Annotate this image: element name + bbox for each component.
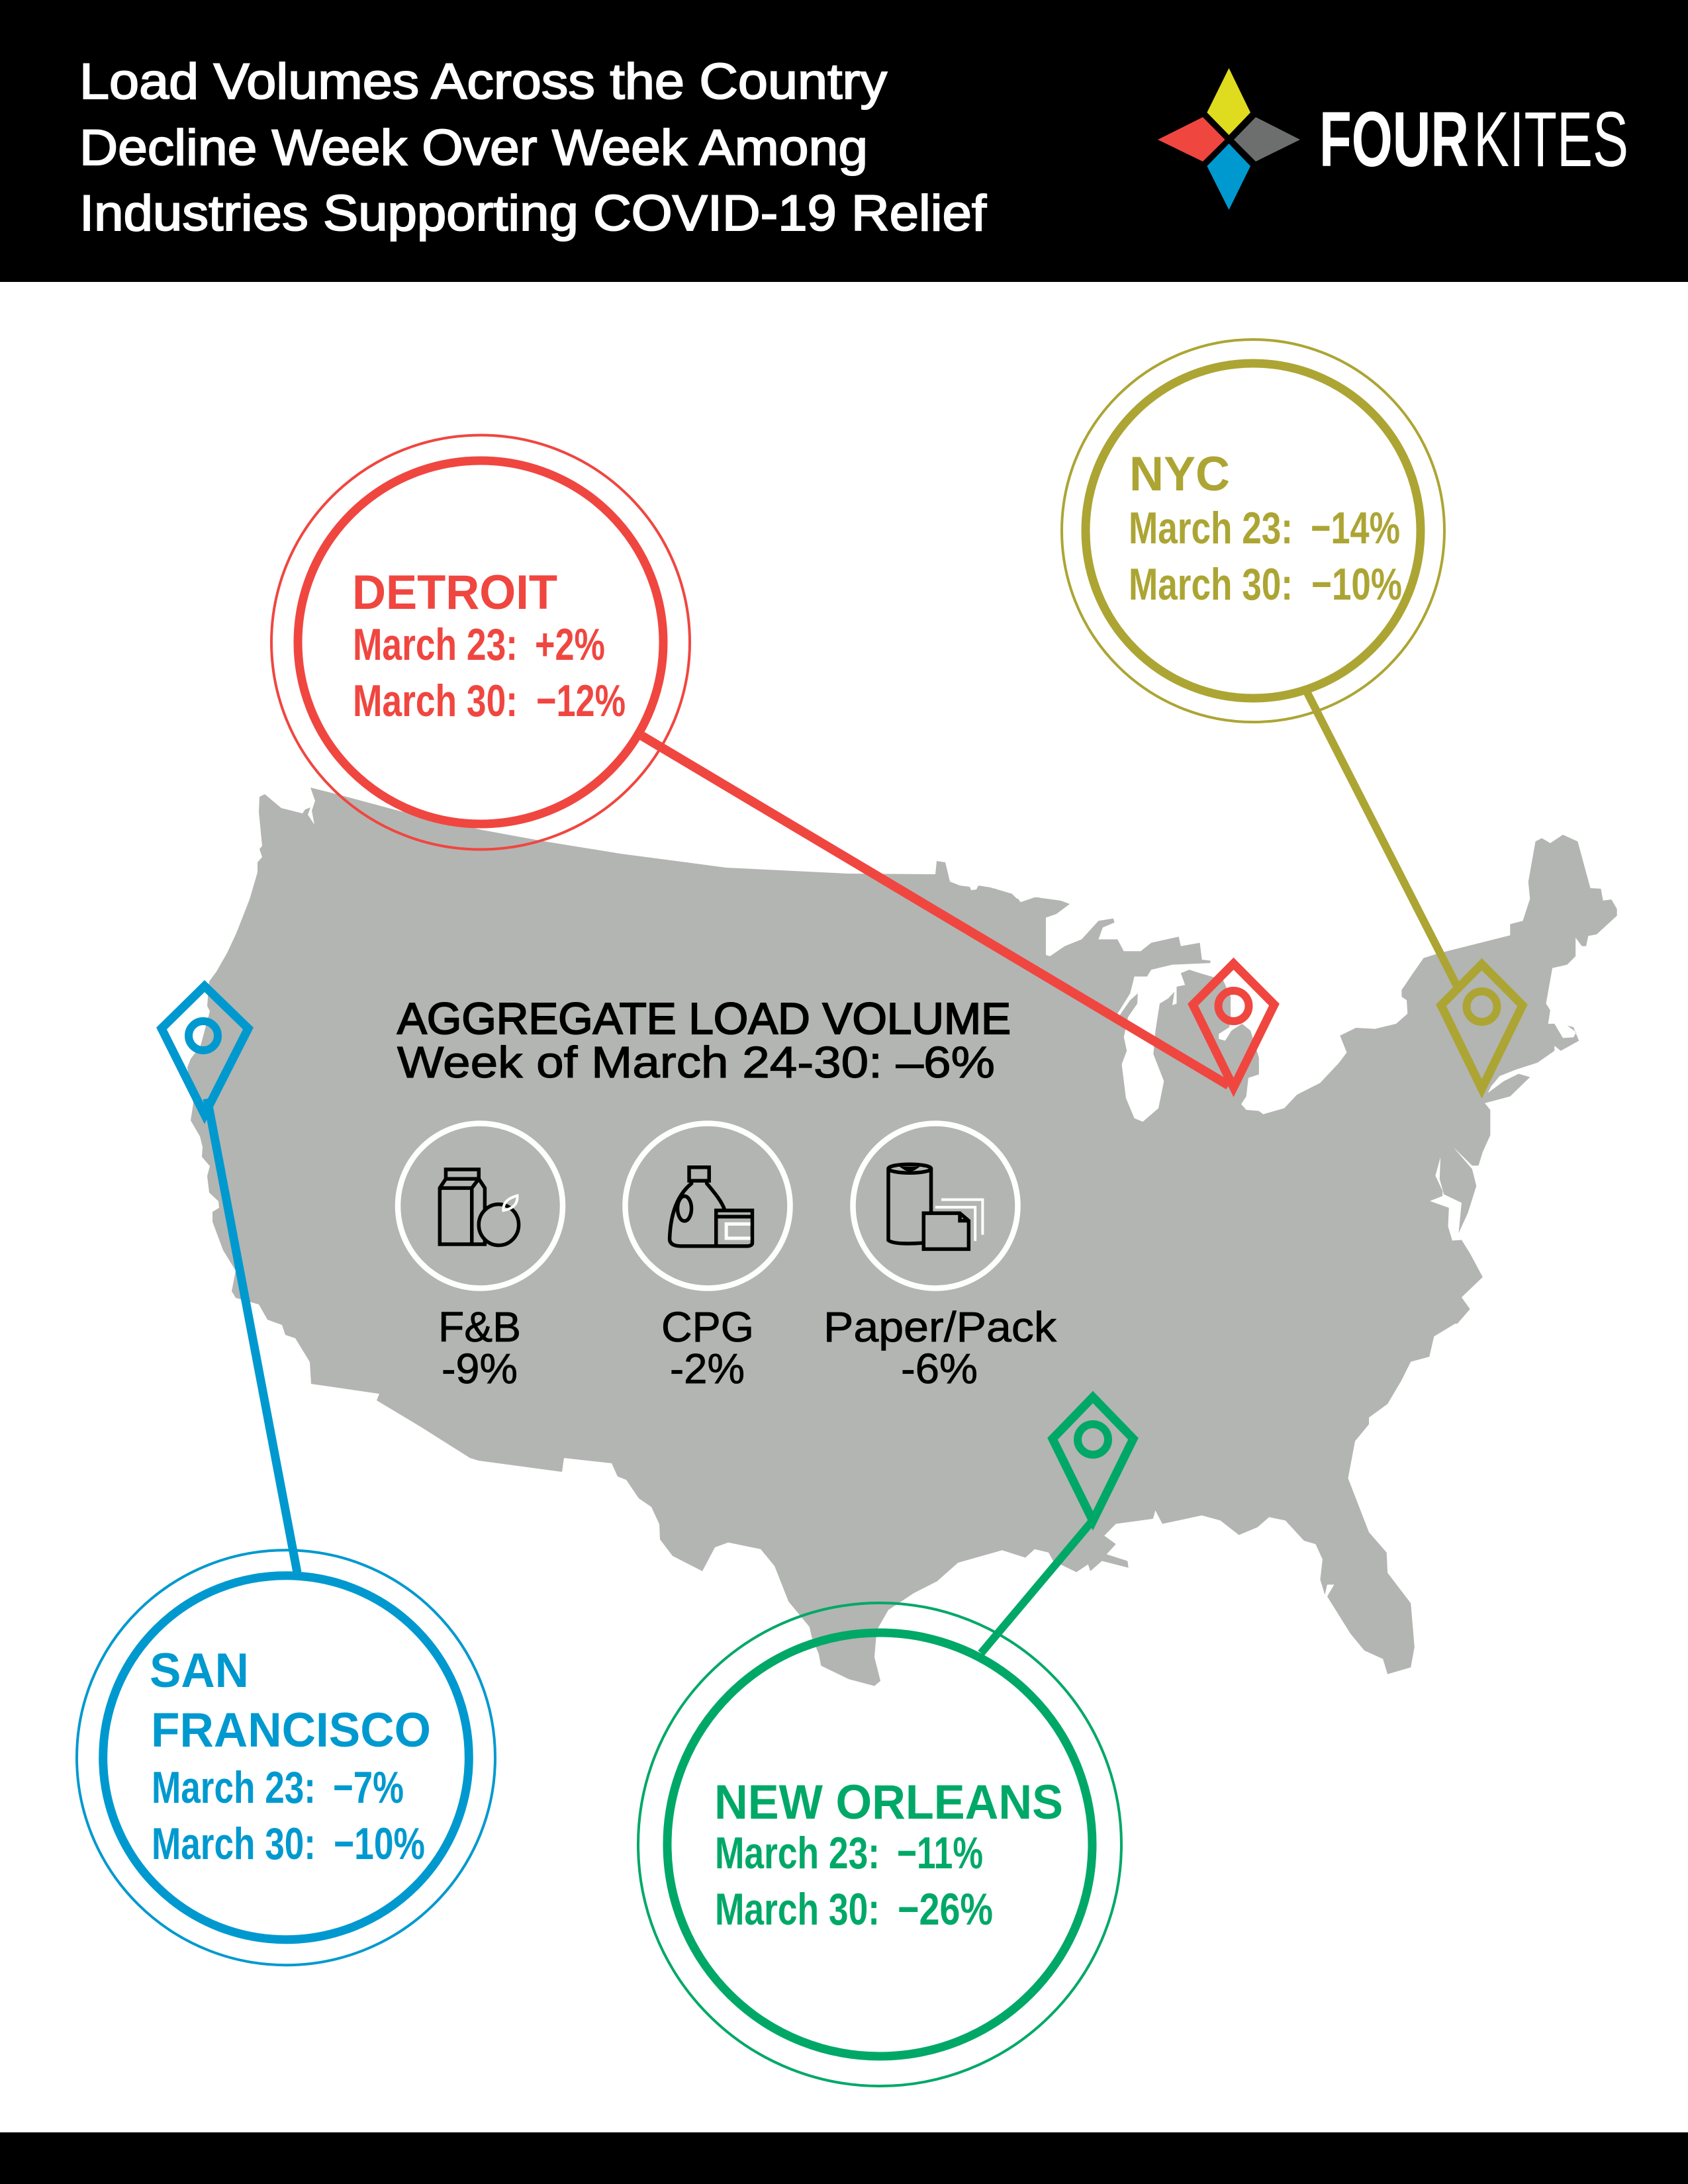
March 30 figure: −10% — [334, 1819, 425, 1869]
heading: aggregate load volume — [397, 994, 1011, 1087]
label: Paper/Pack: Paper/Pack — [823, 1303, 1057, 1351]
panel: CPG — [625, 1124, 790, 1392]
March 23 figure: −11% — [897, 1828, 983, 1878]
map: contiguous United States — [187, 788, 1617, 1686]
March 23 figure: March 23: — [152, 1762, 316, 1813]
city name: NEW ORLEANS — [714, 1776, 1063, 1829]
title: Load Volumes Across the Country — [79, 54, 887, 110]
panel: New Orleans — [638, 1603, 1121, 2086]
March 23 figure: March 23: — [715, 1828, 880, 1878]
March 30 figure: −26% — [898, 1884, 993, 1934]
title — [79, 54, 987, 242]
March 30 figure: March 30: — [1129, 559, 1293, 610]
pin and leader: Detroit — [642, 736, 1274, 1087]
ring — [638, 1603, 1121, 2086]
pin and leader: San Francisco — [162, 986, 297, 1572]
header band — [0, 0, 1688, 282]
value: CPG: -2% — [670, 1345, 745, 1392]
ring — [1062, 340, 1444, 722]
label: CPG: CPG — [661, 1303, 754, 1351]
icon: four kites mark — [1158, 68, 1300, 210]
ring — [271, 435, 690, 850]
icon circle: paper and packaging — [853, 1124, 1018, 1288]
pin and leader: New Orleans — [981, 1397, 1133, 1653]
logo: FourKites — [1158, 68, 1628, 210]
title: Decline Week Over Week Among — [79, 120, 868, 176]
value: Paper/Pack: -6% — [901, 1345, 978, 1392]
March 23 figure: +2% — [535, 619, 605, 670]
March 30 figure: −10% — [1311, 559, 1402, 610]
panel: Paper/Pack — [823, 1124, 1057, 1392]
icon circle: food and beverage — [398, 1124, 563, 1288]
heading: aggregate load volume: Week of March 24-30: –6% — [397, 1038, 995, 1087]
wordmark: FOUR — [1319, 96, 1469, 183]
March 23 figure: March 23: — [1129, 503, 1293, 553]
March 23 figure: March 23: — [353, 619, 518, 670]
city name: SAN — [150, 1644, 249, 1698]
panel: Detroit — [271, 435, 690, 850]
heading: aggregate load volume: AGGREGATE LOAD VOLUME — [397, 994, 1011, 1044]
panel: San Francisco — [77, 1550, 495, 1965]
March 30 figure: March 30: — [353, 676, 518, 726]
icon circle: consumer packaged goods — [625, 1124, 790, 1288]
label: F&B: F&B — [438, 1303, 521, 1351]
March 30 figure: March 30: — [715, 1884, 880, 1934]
value: F&B: -9% — [442, 1345, 518, 1392]
city name — [150, 1644, 431, 1757]
March 30 figure: March 30: — [152, 1819, 316, 1869]
footer band — [0, 2132, 1688, 2184]
city name: DETROIT — [352, 566, 557, 619]
title: Industries Supporting COVID-19 Relief — [79, 185, 987, 242]
ring — [77, 1550, 495, 1965]
March 23 figure: −14% — [1311, 503, 1400, 553]
March 30 figure: −12% — [536, 676, 626, 726]
March 23 figure: −7% — [333, 1762, 404, 1813]
pin and leader: NYC — [1307, 693, 1523, 1089]
city name: NYC — [1129, 447, 1230, 501]
city name: FRANCISCO — [151, 1704, 431, 1757]
panel: F&B — [398, 1124, 563, 1392]
panel: NYC — [1062, 340, 1444, 722]
